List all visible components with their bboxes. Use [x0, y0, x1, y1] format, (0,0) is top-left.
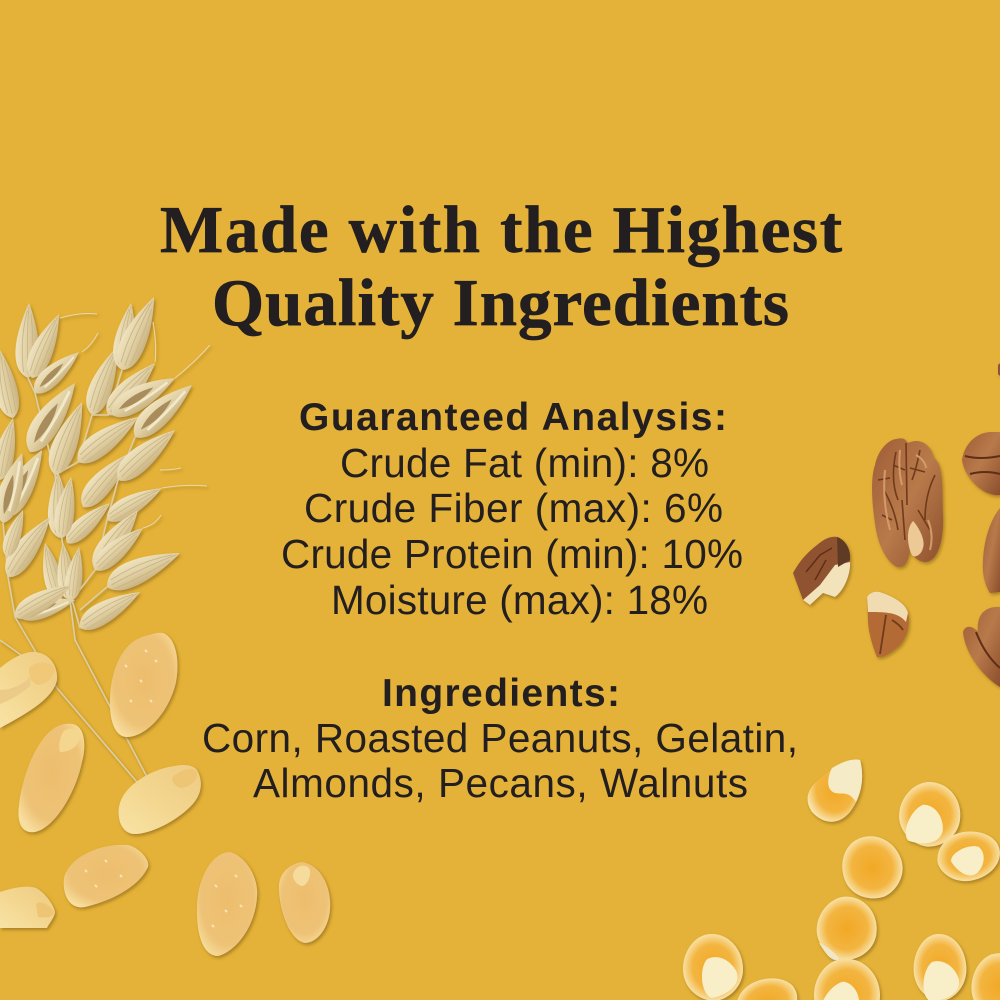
- pecan, top right edge: [962, 432, 1000, 495]
- peanut 5: [64, 845, 148, 907]
- illustration: corn kernels: [683, 759, 1000, 1000]
- list: analysis values: Crude Fat (min): 8%: [340, 440, 709, 486]
- list: analysis values: Crude Fiber (max): 6%: [304, 485, 723, 531]
- title: [160, 193, 843, 340]
- pecan, bottom right edge: [963, 607, 1000, 687]
- title: Quality Ingredients: [212, 266, 789, 340]
- pecan piece, left: [793, 537, 850, 605]
- list: analysis values: [281, 440, 743, 623]
- text block: guaranteed analysis: [281, 396, 743, 623]
- list: ingredients: Corn, Roasted Peanuts, Gelatin,: [202, 715, 798, 761]
- pecan half, large: [872, 438, 943, 567]
- kernel 1: [808, 759, 862, 822]
- peanut 8: [279, 862, 330, 943]
- peanut 2: [110, 633, 177, 737]
- kernel 3: [933, 826, 1000, 886]
- illustration: peanuts: [0, 633, 330, 956]
- list: ingredients: Almonds, Pecans, Walnuts: [253, 760, 748, 806]
- kernel 4: [833, 827, 911, 907]
- pecan, middle right edge: [983, 508, 1000, 593]
- kernel 9: [914, 934, 966, 1000]
- peanut 1: [0, 652, 57, 728]
- heading: guaranteed analysis: Guaranteed Analysis:: [299, 396, 727, 439]
- illustration: oat sprig: [0, 292, 210, 782]
- kernel 6: [683, 934, 743, 1000]
- list: ingredients: [202, 715, 798, 806]
- kernel 10: [972, 953, 1000, 1000]
- kernel 8: [814, 959, 880, 1000]
- peanut 7: [197, 852, 257, 956]
- peanut 3: [18, 724, 84, 832]
- title: Made with the Highest: [160, 193, 843, 267]
- text block: ingredients: [202, 672, 798, 806]
- peanut 6: [0, 887, 55, 928]
- pecan piece, lower: [867, 592, 909, 657]
- heading: ingredients: Ingredients:: [382, 672, 620, 715]
- kernel 2: [894, 777, 966, 851]
- illustration: pecans: [793, 363, 1000, 687]
- kernel 7: [729, 970, 805, 1000]
- kernel 5: [812, 892, 882, 965]
- peanut 4: [119, 765, 201, 834]
- pecan, tiny edge: [998, 363, 1000, 376]
- list: analysis values: Crude Protein (min): 10%: [281, 531, 743, 577]
- list: analysis values: Moisture (max): 18%: [331, 577, 708, 623]
